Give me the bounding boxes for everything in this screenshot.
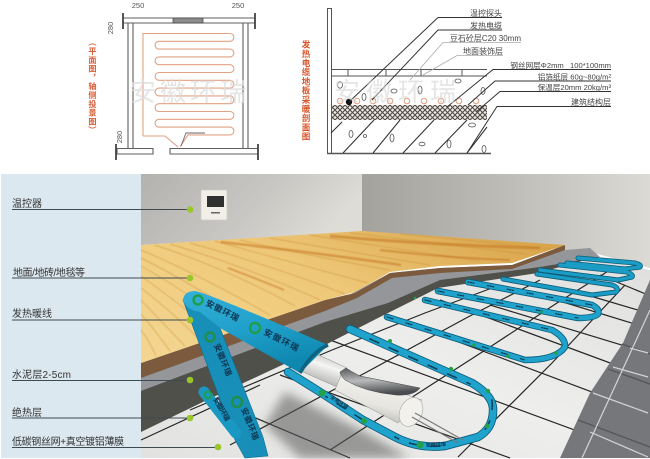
big cable: upper arm — [183, 291, 328, 373]
layer labels: 地面装饰层 — [463, 46, 503, 56]
big cable logos: 安徽环瑞 — [329, 394, 350, 411]
thermostat — [201, 190, 227, 220]
dimension labels — [106, 1, 244, 143]
floor shadow beside cut cable — [265, 392, 410, 458]
panel: 3D floor heating cutaway — [141, 174, 650, 458]
cable cross sections — [337, 98, 479, 104]
far cables — [503, 258, 640, 295]
layer labels — [450, 8, 611, 107]
middle cables outline — [387, 282, 598, 360]
big cable logos — [194, 296, 446, 449]
heating cable layout — [143, 34, 234, 147]
cable printing — [387, 282, 592, 360]
big cable logos: 安徽环瑞 — [239, 406, 261, 441]
insulation hatch layer — [332, 105, 487, 120]
small cable logos — [318, 297, 558, 448]
wood dark streaks — [221, 236, 540, 290]
callout: steel mesh and foil: 低碳钢丝网+真空镀铝薄膜 — [12, 435, 124, 448]
wall and ground — [327, 8, 491, 154]
big cable logos: 安徽环瑞 — [426, 441, 446, 449]
cut cable: foil and core — [303, 350, 463, 443]
structural diagonals — [331, 120, 487, 153]
layer labels: 建筑结构层 — [571, 97, 611, 107]
wood floor edge — [141, 245, 565, 378]
callout: insulation layer: 绝热层 — [12, 406, 42, 419]
mesh lines on board — [141, 270, 648, 458]
temperature sensor wire — [181, 133, 205, 146]
layer labels: 豆石砼层C20 30mm — [450, 33, 521, 43]
wall left — [141, 174, 362, 245]
window — [173, 18, 203, 23]
front cable outline — [288, 329, 493, 447]
callout: heating cable: 发热暖线 — [12, 307, 52, 320]
screed top — [141, 248, 600, 391]
big cable logos: 安徽环瑞 — [212, 342, 234, 377]
serpentine heating cables — [288, 258, 640, 447]
wall right — [362, 174, 650, 268]
layer labels: 铝箔纸层 60g~80g/m² — [538, 72, 611, 82]
silver mesh bars — [582, 310, 650, 458]
temperature probe — [346, 99, 352, 105]
vertical title: plan view: （平面图，轴侧投景图） — [88, 38, 97, 135]
screed face — [141, 248, 596, 432]
callout: cement layer — [12, 368, 193, 383]
big cable end rim — [300, 345, 328, 373]
callouts: layer labels and leader lines — [12, 197, 221, 450]
dimension labels: 280 — [106, 22, 115, 34]
panel: label column — [1, 174, 142, 458]
small cable stub — [204, 392, 236, 433]
watermark: 安徽环瑞 — [334, 77, 462, 107]
callout: heating cable — [12, 307, 193, 323]
dimension labels: 250 — [132, 1, 144, 10]
wood grain — [141, 233, 550, 356]
big cable logos: 安徽环瑞 — [204, 298, 241, 323]
dark subfloor — [560, 280, 650, 458]
callout: steel mesh and foil — [12, 435, 221, 450]
callout: cement layer: 水泥层2-5cm — [12, 368, 71, 381]
vertical title: section view: 发热电缆地板采暖剖面图 — [301, 39, 311, 142]
big cable logos: 安徽环瑞 — [262, 327, 301, 353]
section drawing: floor heating layers — [327, 8, 611, 154]
big cable logos: 安徽环瑞 — [211, 396, 232, 423]
callout: thermostat: 温控器 — [12, 197, 42, 210]
plan drawing: floor plan with cable layout — [106, 1, 258, 160]
watermark: 安徽环瑞 — [130, 77, 250, 107]
insulation board — [141, 257, 650, 458]
dimension labels: 250 — [232, 1, 244, 10]
aggregate pebbles — [338, 79, 486, 152]
far cables outline — [503, 258, 640, 295]
callout: floor finish: 地面/地砖/地毯等 — [13, 266, 85, 279]
layer labels: 保温层20mm 20kg/m³ — [538, 83, 611, 92]
room walls — [116, 13, 258, 160]
callout: floor finish — [12, 266, 193, 281]
layer labels: 发热电缆 — [470, 20, 502, 30]
front cable printing — [325, 339, 492, 446]
callout: insulation layer — [12, 406, 193, 421]
layer labels: 温控探头 — [470, 8, 502, 18]
middle cables — [387, 282, 598, 360]
front cable — [288, 329, 493, 447]
big cable: leg — [183, 300, 268, 458]
subfloor joints — [578, 344, 650, 447]
layer labels: 钢丝网层Φ2mm 100*100mm — [510, 60, 611, 70]
leader lines — [349, 18, 611, 153]
dimension labels: 280 — [115, 131, 124, 143]
callout: thermostat — [12, 197, 193, 213]
wood floor — [141, 231, 565, 363]
floor finish layer — [332, 70, 487, 76]
